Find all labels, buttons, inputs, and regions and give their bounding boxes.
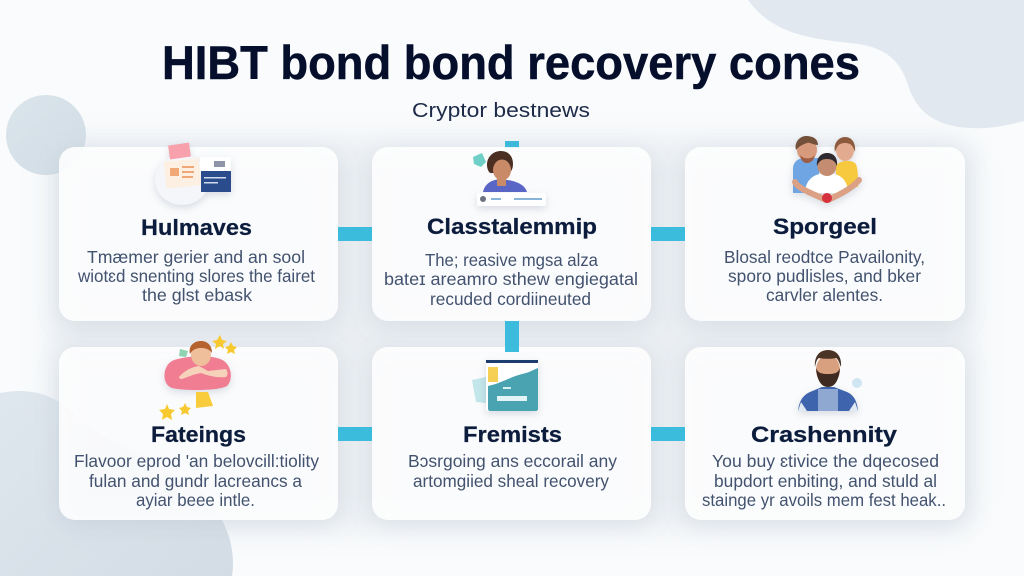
icon: documents [155, 143, 231, 205]
background blob: bottom left [0, 391, 233, 576]
body text: ayiar beee intle. [136, 490, 255, 510]
heading: Sporgeel [773, 214, 877, 239]
heading: Classtalemmip [427, 214, 597, 239]
heading: Hulmaves [141, 215, 252, 240]
body text: sporo pudlisles, and bker [728, 266, 921, 286]
body text: recuded cordiineuted [430, 289, 591, 309]
icon: bearded man [798, 350, 862, 411]
panel: Hulmaves [59, 143, 338, 321]
panel: Crashennity [685, 347, 965, 520]
connectors between panels [338, 227, 685, 441]
body text [702, 451, 946, 510]
panel: Fateings [59, 335, 338, 520]
body text: carvler alentes. [766, 285, 883, 305]
body text: bupdort enbiting, and stuld al [714, 471, 937, 491]
body text [77, 247, 315, 305]
body text: You buy ɛtivice the dqecosed [712, 451, 939, 471]
icon: woman with banner [473, 151, 546, 206]
body text: the glst ebask [142, 285, 252, 305]
icon: card folder [472, 360, 538, 411]
body text: Bɔsrgoing ans eccorail any [408, 451, 617, 471]
body text: fulan and gundr lacreancs a [89, 471, 302, 491]
body text: Blosal reodtce Pavailonity, [724, 247, 925, 267]
panel: Fremists [372, 347, 651, 520]
icon: family [793, 136, 859, 203]
body text [724, 247, 925, 305]
subtitle: Cryptor bestnews [412, 100, 590, 122]
connector: top stub [505, 141, 519, 148]
body text: Flavoor eprod 'an belovcill:tiolity [74, 451, 319, 471]
title: HIBT bond bond recovery cones [162, 36, 860, 89]
background circle: left [6, 95, 86, 175]
body text: bateɪ areamro sthew engiegatal [384, 269, 638, 289]
body text [384, 250, 638, 309]
heading: Fateings [151, 422, 246, 447]
body text: wiotɛd snenting slores the fairet [77, 266, 315, 286]
body text [408, 451, 617, 491]
heading: Fremists [463, 422, 562, 447]
body text: stainge yr avoils mem fest heak.. [702, 490, 946, 510]
body text [74, 451, 319, 510]
panel: Sporgeel [685, 136, 965, 321]
panel: Classtalemmip [372, 147, 651, 321]
body text: The; reasive mgsa alza [425, 250, 598, 270]
body text: artomgiied sheal recovery [413, 471, 609, 491]
body text: Tmæmer gerier and an sool [87, 247, 305, 267]
heading: Crashennity [751, 422, 898, 447]
background blob: top right [748, 0, 1024, 128]
icon: child on pink cushion [159, 335, 237, 420]
